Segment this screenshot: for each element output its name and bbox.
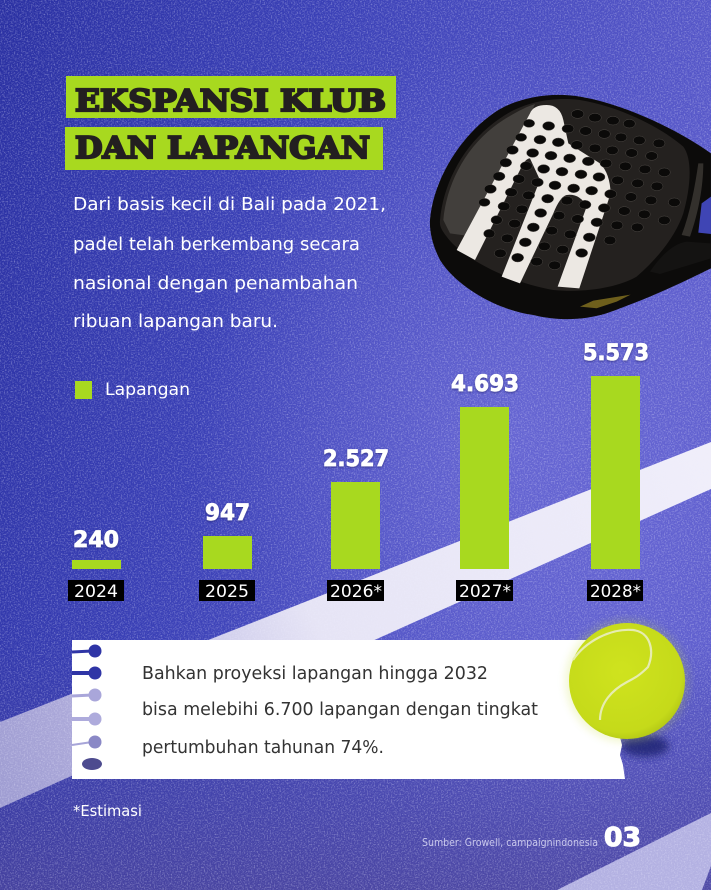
racket: gold label [580, 295, 631, 308]
bar 2026: 2.527 [323, 447, 389, 472]
intro text: Dari basis kecil di Bali pada 2021, [73, 194, 386, 215]
callout: notebook paper note [72, 640, 625, 779]
bar 2028: 5.573 [583, 341, 649, 366]
icon: tennis ball [565, 619, 689, 743]
title: DAN LAPANGAN [75, 131, 370, 166]
bar 2025 [199, 501, 255, 602]
intro text: padel telah berkembang secara [73, 234, 360, 255]
bar 2028: 2028* [590, 582, 641, 602]
padel racket photo illustration [430, 95, 711, 319]
intro text [73, 194, 386, 332]
racket: speckled worn area [443, 104, 535, 237]
callout: notebook paper note: pertumbuhan tahunan 74%. [142, 738, 384, 758]
page number: 03 [604, 823, 641, 853]
bar 2027: 2027* [459, 582, 511, 602]
title [65, 76, 396, 170]
bar chart [68, 341, 649, 602]
bar 2028 [583, 341, 649, 602]
bar 2027 [451, 372, 519, 602]
callout: notebook paper note: bisa melebihi 6.700 lapangan dengan tingkat [142, 700, 538, 720]
bar 2025: 947 [205, 501, 250, 526]
intro text: nasional dengan penambahan [73, 273, 358, 294]
racket: holes [479, 110, 680, 270]
legend: Lapangan [105, 380, 190, 400]
intro text: ribuan lapangan baru. [73, 311, 278, 332]
bar 2024 [68, 528, 124, 602]
racket: throat opening [650, 242, 711, 274]
bar 2026 [323, 447, 389, 602]
source: Sumber: Growell, campaignindonesia [422, 836, 598, 849]
title: EKSPANSI KLUB [75, 84, 386, 119]
bar 2025: 2025 [205, 582, 249, 602]
callout: notebook paper note: Bahkan proyeksi lapangan hingga 2032 [142, 664, 488, 684]
racket: white stripes logo [457, 105, 611, 288]
notebook binding holes [72, 644, 102, 770]
bar 2026: 2026* [330, 582, 382, 602]
bar 2024: 240 [73, 528, 119, 553]
bar 2024: 2024 [74, 582, 118, 602]
bar 2027: 4.693 [451, 372, 519, 397]
tennis ball shadow [621, 735, 669, 757]
footnote: *Estimasi [73, 802, 142, 820]
